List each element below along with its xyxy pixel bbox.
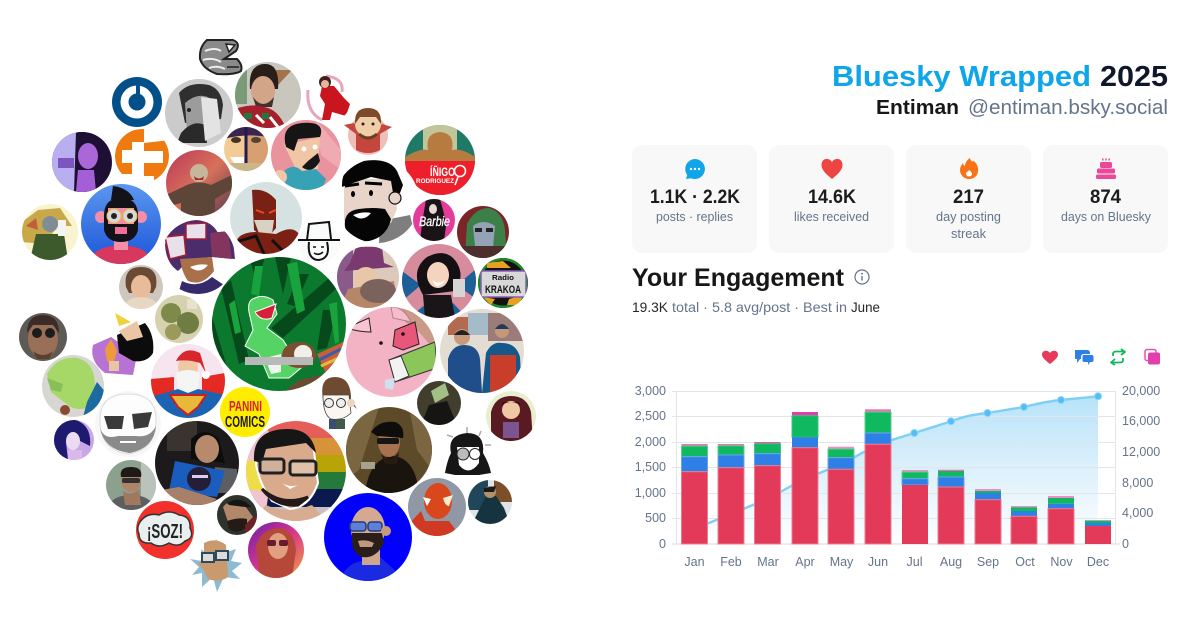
avatar: woman with curly hair photo bbox=[119, 265, 163, 309]
cumulative line bbox=[694, 396, 1098, 529]
avatar: man in hat in autumn forest bbox=[346, 407, 432, 493]
panel: days on Bluesky: days on Bluesky bbox=[1061, 209, 1151, 224]
panel: posts and replies bbox=[632, 145, 757, 253]
avatar: green character on yellow comic bbox=[22, 204, 78, 260]
icon: flame bbox=[960, 158, 978, 179]
avatar: Panini Comics: PANINI bbox=[229, 398, 262, 415]
avatar: cartoon head bbox=[322, 377, 357, 429]
right axis labels: 4,000 bbox=[1122, 506, 1153, 520]
month labels: Feb bbox=[720, 555, 742, 569]
avatar: turtles drawing bbox=[155, 295, 203, 343]
panel: days on Bluesky bbox=[1043, 145, 1168, 253]
icon: heart bbox=[822, 159, 842, 179]
right axis labels: 16,000 bbox=[1122, 414, 1160, 428]
chart legend bbox=[1042, 349, 1160, 365]
avatar: psychedelic woman bbox=[248, 522, 304, 578]
month labels: May bbox=[830, 555, 854, 569]
left axis labels bbox=[635, 384, 666, 551]
avatar: Doctor Doom bbox=[457, 206, 509, 258]
avatar: Radio Krakoa: Radio bbox=[492, 273, 514, 282]
panel: day posting streak: streak bbox=[951, 226, 986, 241]
icon: legend reposts bbox=[1111, 349, 1125, 365]
icon: legend heart bbox=[1042, 351, 1058, 364]
avatar: grey man covering eye bbox=[165, 79, 233, 147]
avatar: man on solid blue background bbox=[324, 493, 412, 581]
left axis labels: 1,000 bbox=[635, 486, 666, 500]
right axis labels: 20,000 bbox=[1122, 384, 1160, 398]
avatar: Willy Wonka bbox=[337, 246, 399, 308]
month labels: Dec bbox=[1087, 555, 1109, 569]
user name and handle: @entiman.bsky.social bbox=[968, 97, 1168, 119]
avatar: Panini Comics: COMICS bbox=[225, 414, 265, 431]
avatar: Santa Superman bbox=[151, 344, 225, 418]
avatar: spider-man bbox=[408, 478, 466, 536]
left axis labels: 2,500 bbox=[635, 409, 666, 423]
panel: day posting streak bbox=[906, 145, 1031, 253]
month labels: Aug bbox=[940, 555, 962, 569]
avatar: orange logo bbox=[115, 128, 170, 186]
icon: cake bbox=[1096, 158, 1116, 179]
stacked bars bbox=[682, 409, 1111, 544]
left axis labels: 2,000 bbox=[635, 435, 666, 449]
avatar: Thing and Inigo Rodriguez: RODRIGUEZ bbox=[416, 178, 454, 185]
avatar: bag head with glasses bbox=[190, 539, 242, 592]
right axis labels: 0 bbox=[1122, 537, 1129, 551]
left axis labels: 3,000 bbox=[635, 384, 666, 398]
month labels bbox=[684, 555, 1109, 569]
avatar: curly haired sketch with glasses bbox=[445, 427, 491, 475]
panel: likes received: likes received bbox=[794, 209, 869, 224]
avatar: Loki figure bbox=[468, 480, 512, 524]
cumulative dots bbox=[911, 393, 1102, 436]
avatar: Thing and Inigo Rodriguez bbox=[405, 125, 475, 195]
avatar: Panini Comics bbox=[220, 387, 270, 437]
avatar: Kermit the Frog with banjo bbox=[212, 257, 346, 391]
avatar: blue background cartoon with beard bbox=[81, 184, 161, 264]
avatar: pig with book bbox=[346, 307, 437, 397]
month labels: Oct bbox=[1015, 555, 1035, 569]
avatar: scarlet witch drawing bbox=[306, 74, 350, 121]
avatar: man with long hair and sunglasses bbox=[19, 313, 67, 361]
icon: legend quotes bbox=[1145, 350, 1160, 364]
engagement summary: 19.3K bbox=[632, 299, 669, 315]
avatar: Barbie bbox=[413, 199, 455, 241]
avatar: woman with dark blue hair bbox=[54, 420, 94, 460]
avatar: Miles Morales bbox=[161, 220, 235, 294]
panel: likes received bbox=[769, 145, 894, 253]
avatar: green Martian Manhunter bbox=[42, 355, 107, 417]
panel: days on Bluesky: 874 bbox=[1090, 187, 1121, 208]
user name and handle bbox=[876, 97, 1168, 119]
avatar: man next to Superman statue bbox=[440, 309, 524, 393]
month labels: Jun bbox=[868, 555, 888, 569]
avatar: iSOZ logo on red: ¡SOZ! bbox=[147, 521, 183, 543]
panel: posts and replies: posts · replies bbox=[656, 209, 733, 224]
avatar: bearded captain cartoon bbox=[92, 313, 153, 375]
user name and handle: Entiman bbox=[876, 97, 959, 119]
month labels: Nov bbox=[1050, 555, 1073, 569]
combined chart: monthly engagement bars and cumulative line bbox=[635, 384, 1160, 569]
icon: info bbox=[855, 270, 869, 284]
month labels: Mar bbox=[757, 555, 779, 569]
avatar: snake logo bbox=[200, 40, 242, 74]
cumulative area bbox=[694, 396, 1098, 544]
month labels: Apr bbox=[795, 555, 815, 569]
engagement summary: June bbox=[851, 299, 880, 315]
avatar: man with sunglasses and beard sketch bbox=[100, 394, 156, 454]
right axis labels: 12,000 bbox=[1122, 445, 1160, 459]
avatar: iSOZ logo on red bbox=[136, 501, 194, 559]
avatar: zombie figure bbox=[166, 150, 232, 216]
avatar: cartoon man in teal shirt bbox=[271, 120, 341, 190]
avatar: curly haired woman on pink and blue bbox=[402, 244, 476, 318]
panel: day posting streak: day posting bbox=[936, 209, 1001, 224]
panel: likes received: 14.6K bbox=[808, 187, 856, 208]
month labels: Sep bbox=[977, 555, 999, 569]
avatar: rainbow background man with glasses bbox=[246, 421, 346, 521]
heading: your engagement: Your Engagement bbox=[632, 264, 845, 292]
avatar: Radio Krakoa: KRAKOA bbox=[485, 284, 521, 296]
panel: posts and replies: 1.1K · 2.2K bbox=[650, 187, 740, 208]
icon: chat bubble bbox=[685, 159, 705, 179]
engagement summary bbox=[632, 299, 880, 315]
avatar: Radio Krakoa bbox=[478, 258, 528, 308]
panel: day posting streak: 217 bbox=[953, 187, 984, 208]
avatar cloud bbox=[19, 40, 536, 592]
avatar: Daredevil bbox=[230, 182, 302, 254]
left axis labels: 1,500 bbox=[635, 460, 666, 474]
title: 2025 bbox=[1100, 61, 1168, 93]
avatar: blue ring logo bbox=[112, 77, 162, 127]
avatar: cartoon woman with maroon hair bbox=[486, 391, 536, 441]
avatar: man with glasses and plants bbox=[106, 460, 156, 510]
avatar: black and white bearded comic man bbox=[342, 160, 416, 243]
avatar: cartoon man in red suit bbox=[344, 108, 392, 155]
avatar: man in christmas sweater bbox=[235, 62, 301, 128]
right axis labels: 8,000 bbox=[1122, 476, 1153, 490]
avatar: hat sketch bbox=[298, 221, 340, 263]
month labels: Jan bbox=[684, 555, 705, 569]
avatar: woman with purple tint bbox=[52, 132, 112, 192]
month labels: Jul bbox=[907, 555, 922, 569]
title: Bluesky Wrapped bbox=[832, 61, 1091, 93]
left axis labels: 500 bbox=[645, 511, 666, 525]
avatar: Barbie: Barbie bbox=[419, 213, 450, 229]
avatar: half face portrait bbox=[224, 127, 268, 171]
engagement summary: total · 5.8 avg/post · Best in bbox=[672, 299, 847, 315]
left axis labels: 0 bbox=[659, 537, 666, 551]
right axis labels bbox=[1122, 384, 1160, 551]
avatar: Thing and Inigo Rodriguez: ÍÑIGO bbox=[430, 164, 455, 179]
avatar: bearded man smiling bbox=[217, 495, 257, 535]
avatar: man with headphones and record bbox=[155, 421, 239, 505]
icon: legend replies bbox=[1075, 350, 1094, 365]
avatar: small dark green figure bbox=[417, 381, 461, 425]
